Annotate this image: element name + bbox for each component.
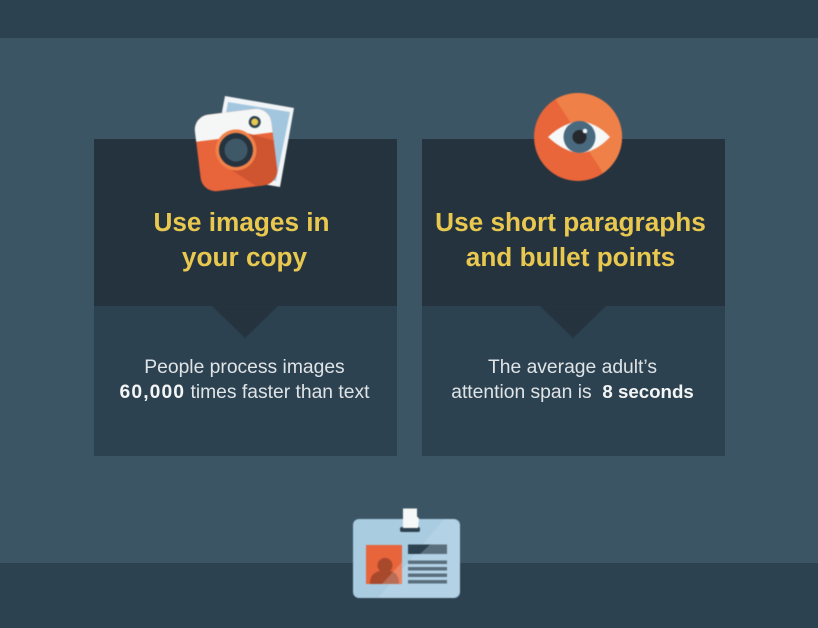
panel header: short paragraphs	[422, 139, 725, 306]
icon: id badge	[352, 508, 461, 599]
photo print	[210, 96, 294, 187]
text: images fact: People process images	[144, 357, 345, 378]
text: images fact	[120, 357, 370, 402]
heading: short paragraphs: Use short paragraphs	[435, 207, 706, 237]
camera body	[193, 107, 279, 193]
panel header: use images	[94, 139, 397, 306]
heading: short paragraphs: and bullet points	[466, 242, 675, 272]
heading: use images: your copy	[182, 242, 307, 272]
pointer arrow	[541, 306, 605, 338]
heading: use images	[153, 207, 330, 272]
text: attention fact: The average adult’s	[488, 357, 657, 378]
text: attention fact	[451, 357, 694, 402]
panel: use images	[94, 139, 397, 456]
panel: short paragraphs	[422, 139, 725, 456]
heading: use images: Use images in	[153, 207, 330, 237]
icon: eye in circle	[533, 92, 623, 182]
pointer arrow	[213, 306, 277, 338]
icon: camera and photo	[194, 95, 295, 192]
top band	[0, 0, 818, 38]
heading: short paragraphs	[435, 207, 706, 272]
text: images fact: 60,000 times faster than text	[120, 382, 369, 402]
text: attention fact: attention span is 8 seconds	[451, 380, 694, 402]
bottom band	[0, 563, 818, 628]
